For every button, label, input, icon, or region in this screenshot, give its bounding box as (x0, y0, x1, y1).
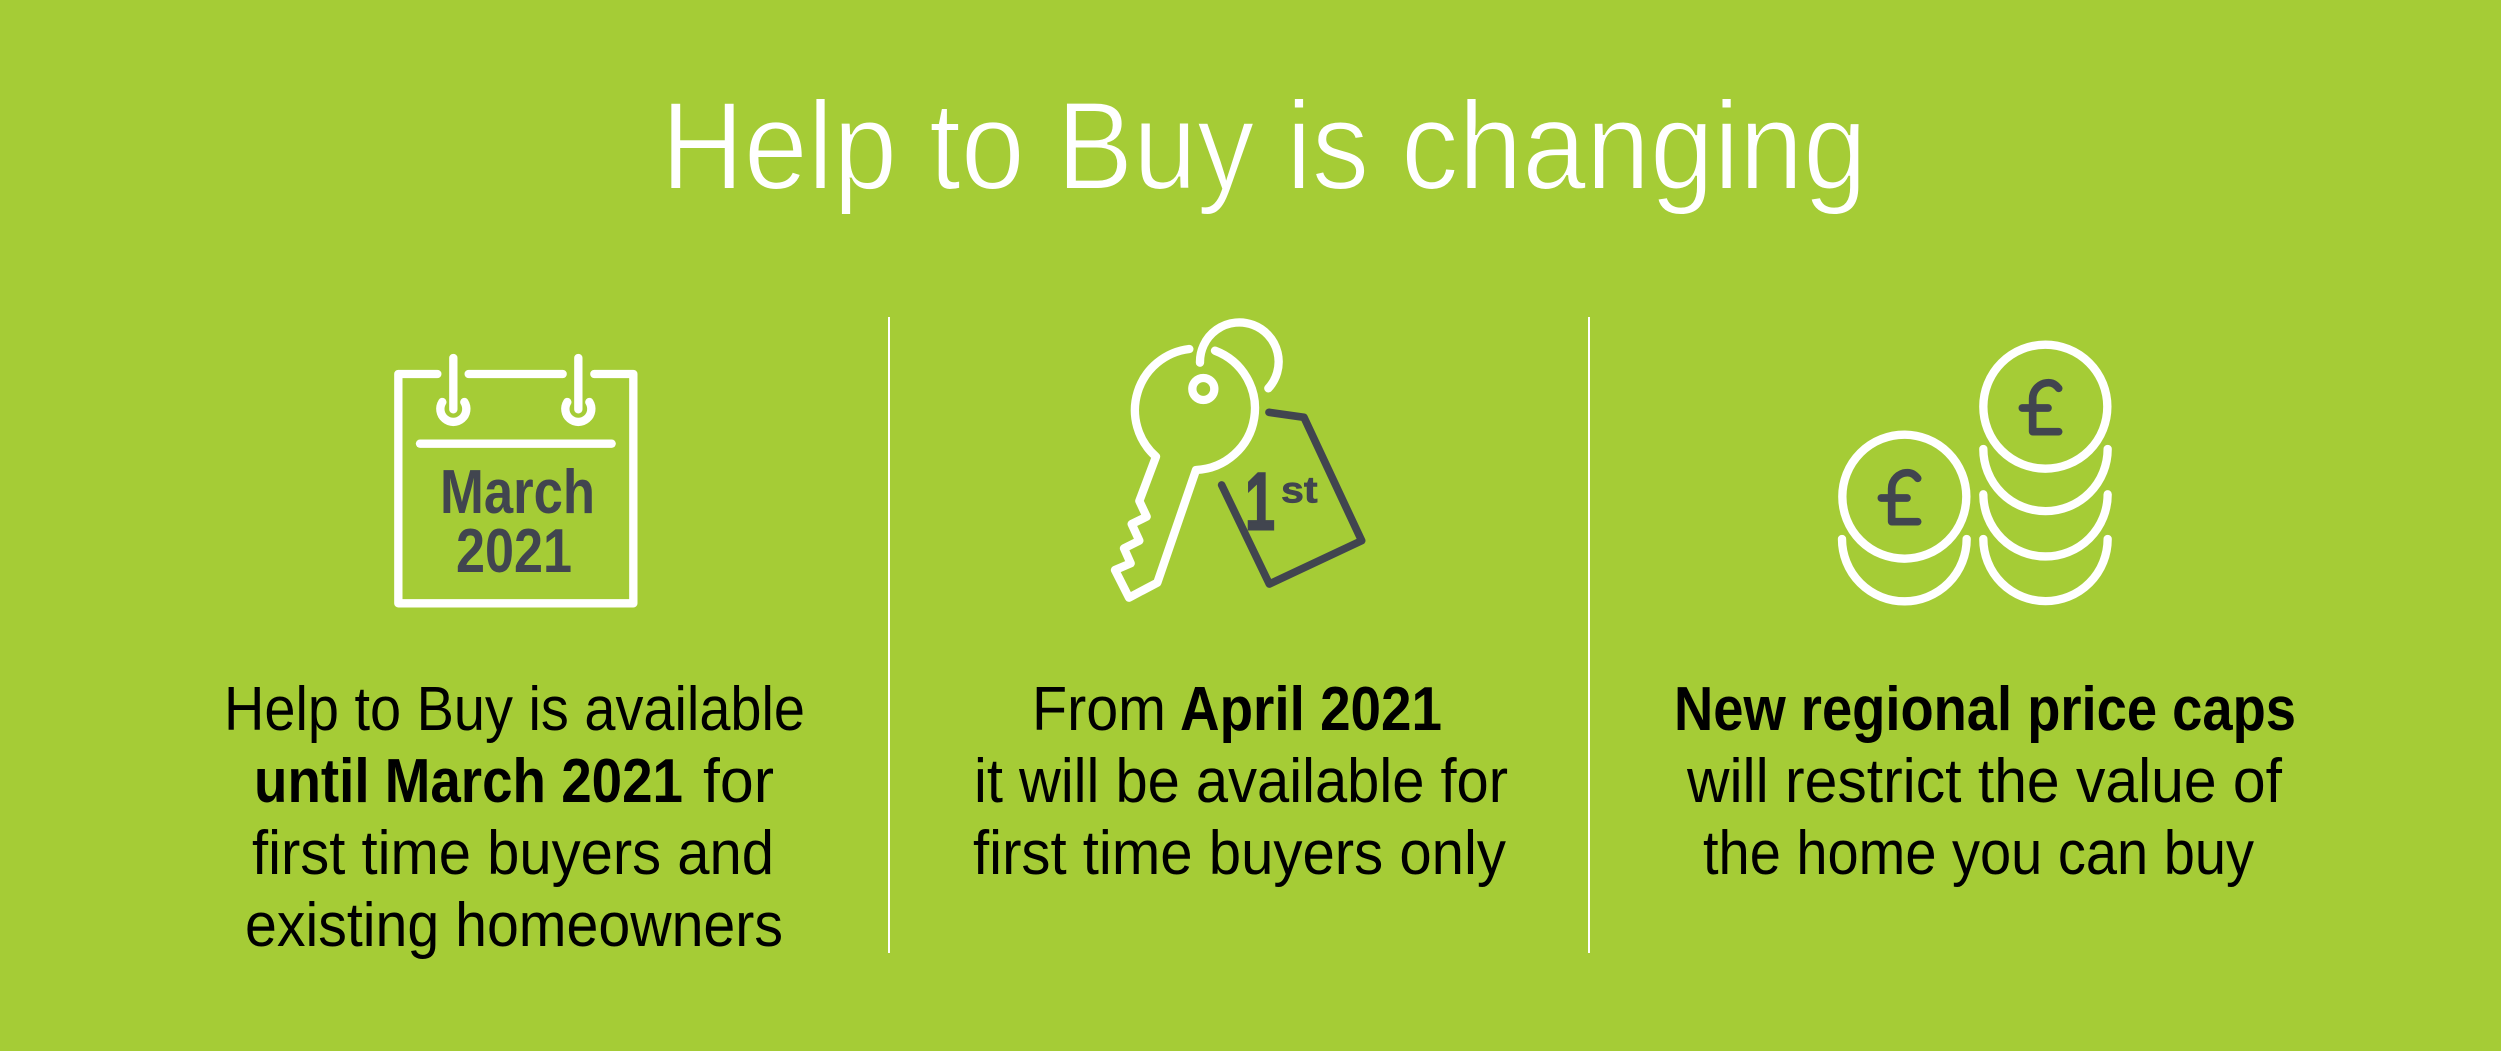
text block: new regional price caps (1674, 675, 2296, 888)
icon: calendar: 2021 (456, 517, 572, 586)
icon: calendar (398, 358, 633, 603)
text block: new regional price caps: will restrict the value of (1686, 747, 2283, 816)
text block: availability until March 2021: Help to Buy is available (224, 675, 805, 744)
text block: new regional price caps: New regional price caps (1674, 675, 2296, 744)
icon: key with 1st tag: st (1281, 470, 1318, 511)
text block: availability until March 2021: first time buyers and (252, 819, 774, 888)
panel: regional price caps (1674, 345, 2296, 888)
icon: key with 1st tag (1115, 322, 1362, 598)
text block: from April 2021: it will be available for (974, 747, 1508, 816)
icon: stacks of pound coins (1842, 345, 2108, 601)
text block: from April 2021: April 2021 (1180, 675, 1442, 744)
text block: new regional price caps: the home you can buy (1703, 819, 2254, 888)
icon: key with 1st tag: 1 (1245, 456, 1275, 547)
text block: from April 2021: From (1032, 675, 1166, 744)
icon: calendar: March (440, 458, 595, 527)
panel: April 2021 first time buyers (973, 322, 1508, 888)
text block: availability until March 2021 (224, 675, 805, 960)
title: Help to Buy is changing (661, 77, 1867, 216)
text block: from April 2021 (973, 675, 1508, 888)
text block: availability until March 2021: existing homeowners (245, 891, 783, 960)
text block: from April 2021: first time buyers only (973, 819, 1506, 888)
text block: availability until March 2021: until March 2021 (254, 747, 683, 816)
text block: availability until March 2021: for (703, 747, 774, 816)
panel: March 2021 deadline (224, 358, 805, 960)
